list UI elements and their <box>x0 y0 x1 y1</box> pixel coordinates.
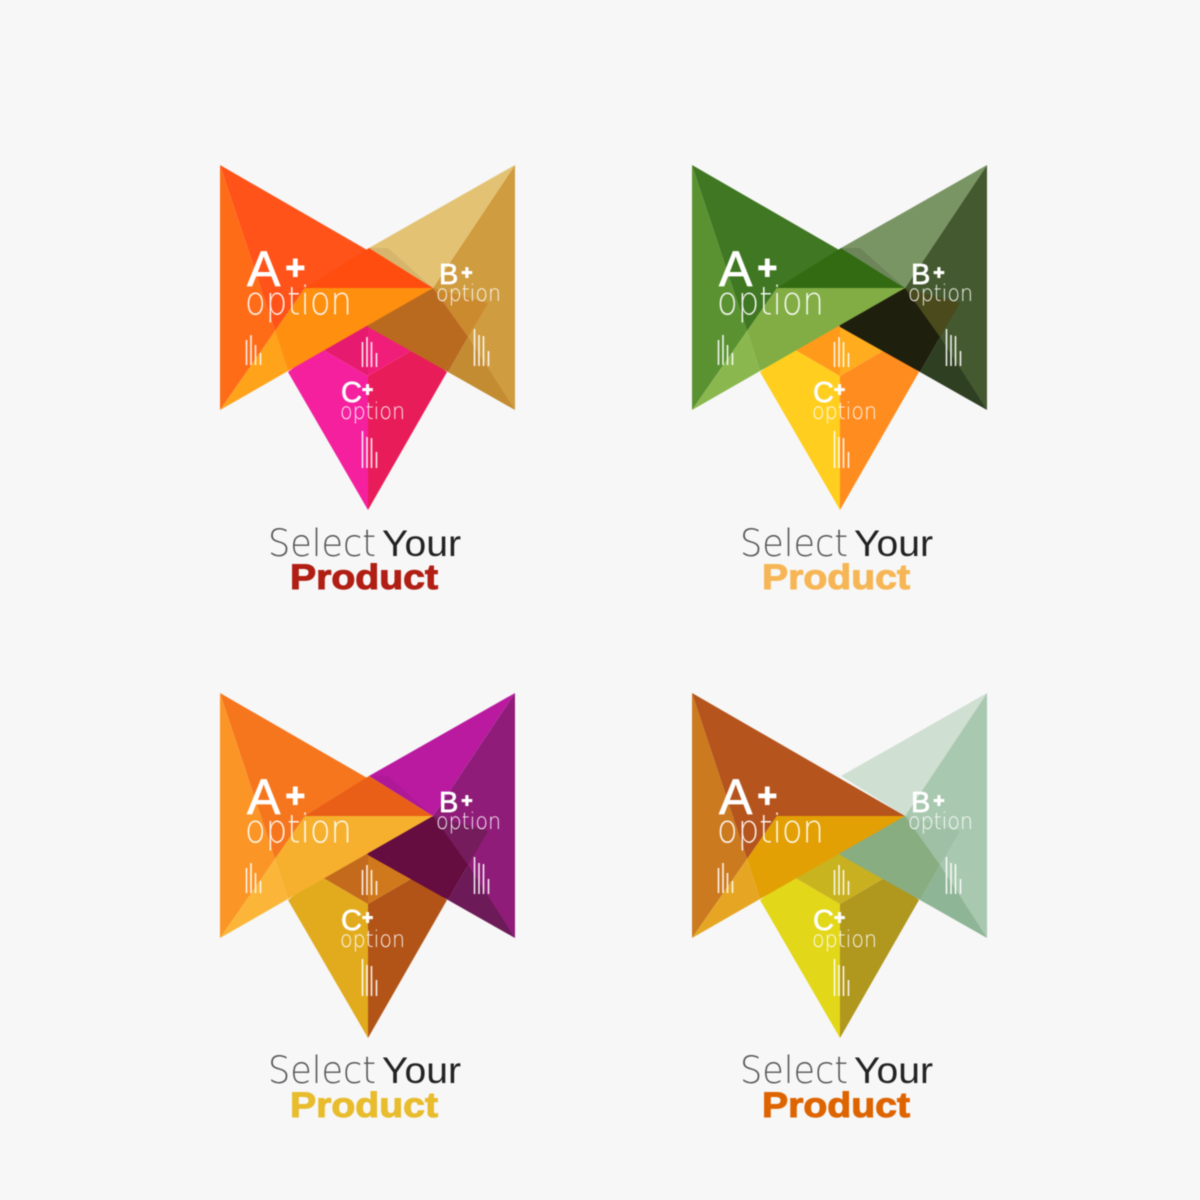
heading: Select Your: Your <box>854 523 933 564</box>
icon: C lower bars <box>834 431 848 468</box>
label: B option: option <box>908 809 973 835</box>
icon: C upper bars <box>362 865 376 895</box>
label: C option: option <box>812 927 877 953</box>
label: A+: A <box>247 769 280 825</box>
label: C+: C <box>341 905 362 937</box>
heading: Select Your: Select <box>740 1049 848 1092</box>
label: C option: option <box>812 399 877 425</box>
heading: Product: Product <box>290 1086 438 1125</box>
label: C+: C <box>341 377 362 409</box>
label: A option: option <box>245 808 352 852</box>
panel: green and yellow product option <box>692 165 987 597</box>
triangle B: purple <box>366 693 515 938</box>
heading: Select Your: Your <box>382 1050 461 1091</box>
icon: B bars <box>946 857 960 894</box>
label: A+: A <box>247 241 280 297</box>
label: B option: option <box>436 809 501 835</box>
heading: Select Your: Select <box>268 522 376 565</box>
label: A option: option <box>717 808 824 852</box>
icon: A bars <box>718 335 732 365</box>
icon: C upper bars <box>362 337 376 367</box>
label: B+: B <box>911 259 930 291</box>
label: B+: + <box>933 263 944 284</box>
triangle C: pink <box>288 318 447 510</box>
label: C+: + <box>834 380 845 401</box>
label: B+: + <box>461 791 472 812</box>
icon: B bars <box>474 329 488 366</box>
triangle A: green <box>692 165 905 410</box>
triangle B: gold <box>366 165 515 410</box>
label: B+: + <box>461 263 472 284</box>
icon: C upper bars <box>834 337 848 367</box>
panel: orange and pink product option <box>220 165 515 597</box>
label: B option: option <box>908 281 973 307</box>
triangle C: amber and brown <box>288 846 447 1038</box>
icon: B bars <box>946 329 960 366</box>
label: C+: + <box>362 380 373 401</box>
triangle A: orange <box>220 693 433 938</box>
triangle B: sage green <box>838 693 987 938</box>
icon: C lower bars <box>362 431 376 468</box>
label: A+: + <box>757 249 777 287</box>
label: A option: option <box>245 280 352 324</box>
triangle A: orange <box>220 165 433 410</box>
icon: A bars <box>718 863 732 893</box>
icon: C upper bars <box>834 865 848 895</box>
label: A+: + <box>757 777 777 815</box>
heading: Product: Product <box>762 1086 910 1125</box>
heading: Select Your: Your <box>854 1050 933 1091</box>
label: B option: option <box>436 281 501 307</box>
heading: Select Your: Select <box>268 1049 376 1092</box>
triangle C: yellow and olive <box>760 846 919 1038</box>
label: A+: + <box>285 249 305 287</box>
icon: A bars <box>246 863 260 893</box>
label: B+: + <box>933 791 944 812</box>
triangle A: brown and amber <box>692 693 905 938</box>
heading: Product: Product <box>290 558 438 597</box>
label: C option: option <box>340 399 405 425</box>
label: A+: + <box>285 777 305 815</box>
triangle B: dark olive <box>838 165 987 410</box>
icon: C lower bars <box>834 959 848 996</box>
label: B+: B <box>439 259 458 291</box>
label: C option: option <box>340 927 405 953</box>
panel: orange and purple product option <box>220 693 515 1125</box>
icon: C lower bars <box>362 959 376 996</box>
label: C+: + <box>362 908 373 929</box>
label: C+: + <box>834 908 845 929</box>
icon: B bars <box>474 857 488 894</box>
label: C+: C <box>813 377 834 409</box>
triangle C: yellow and orange <box>760 318 919 510</box>
label: A+: A <box>719 769 752 825</box>
heading: Select Your: Your <box>382 523 461 564</box>
heading: Product: Product <box>762 558 910 597</box>
heading: Select Your: Select <box>740 522 848 565</box>
label: B+: B <box>911 787 930 819</box>
label: B+: B <box>439 787 458 819</box>
label: C+: C <box>813 905 834 937</box>
icon: A bars <box>246 335 260 365</box>
panel: brown and sage product option <box>692 693 987 1125</box>
label: A+: A <box>719 241 752 297</box>
label: A option: option <box>717 280 824 324</box>
